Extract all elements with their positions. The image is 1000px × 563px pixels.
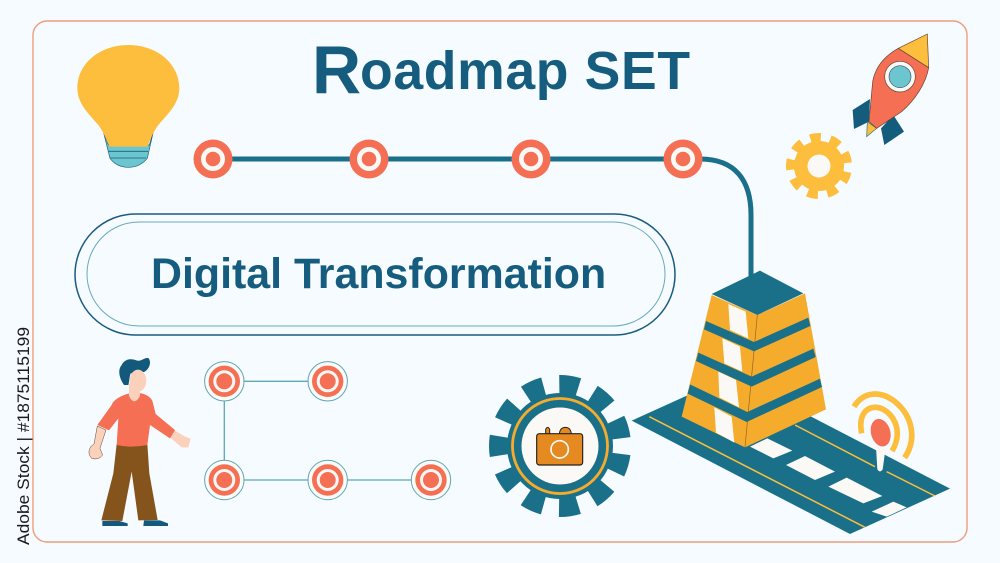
icon: large gear with camera	[492, 378, 628, 514]
icon: camera	[537, 427, 583, 465]
illustration: road and tower	[632, 271, 950, 534]
lower arm and hand, left	[89, 426, 106, 459]
trousers	[101, 444, 158, 521]
path connector lines	[224, 381, 431, 480]
icon: light bulb	[77, 45, 179, 167]
tower	[682, 271, 826, 447]
roadmap connector line	[213, 159, 751, 278]
pill panel: Digital Transformation	[75, 214, 675, 335]
pill heading: Digital Transformation	[151, 250, 606, 298]
icon: small yellow gear	[785, 132, 853, 200]
side credit label: Adobe Stock | #1875115199	[15, 327, 33, 545]
shoes	[102, 521, 128, 526]
top roadmap nodes	[194, 140, 702, 178]
title: R	[312, 32, 361, 108]
neck	[129, 383, 140, 401]
icon: location signal	[854, 394, 912, 471]
shirt	[97, 393, 175, 447]
lower path nodes	[205, 362, 451, 500]
title: oadmap SET	[360, 42, 690, 101]
icon: rocket	[853, 34, 929, 145]
title	[312, 32, 690, 108]
icon: person walking	[89, 358, 191, 526]
road	[632, 375, 950, 534]
head	[130, 370, 146, 392]
hair	[119, 358, 150, 385]
right hand	[170, 430, 191, 447]
